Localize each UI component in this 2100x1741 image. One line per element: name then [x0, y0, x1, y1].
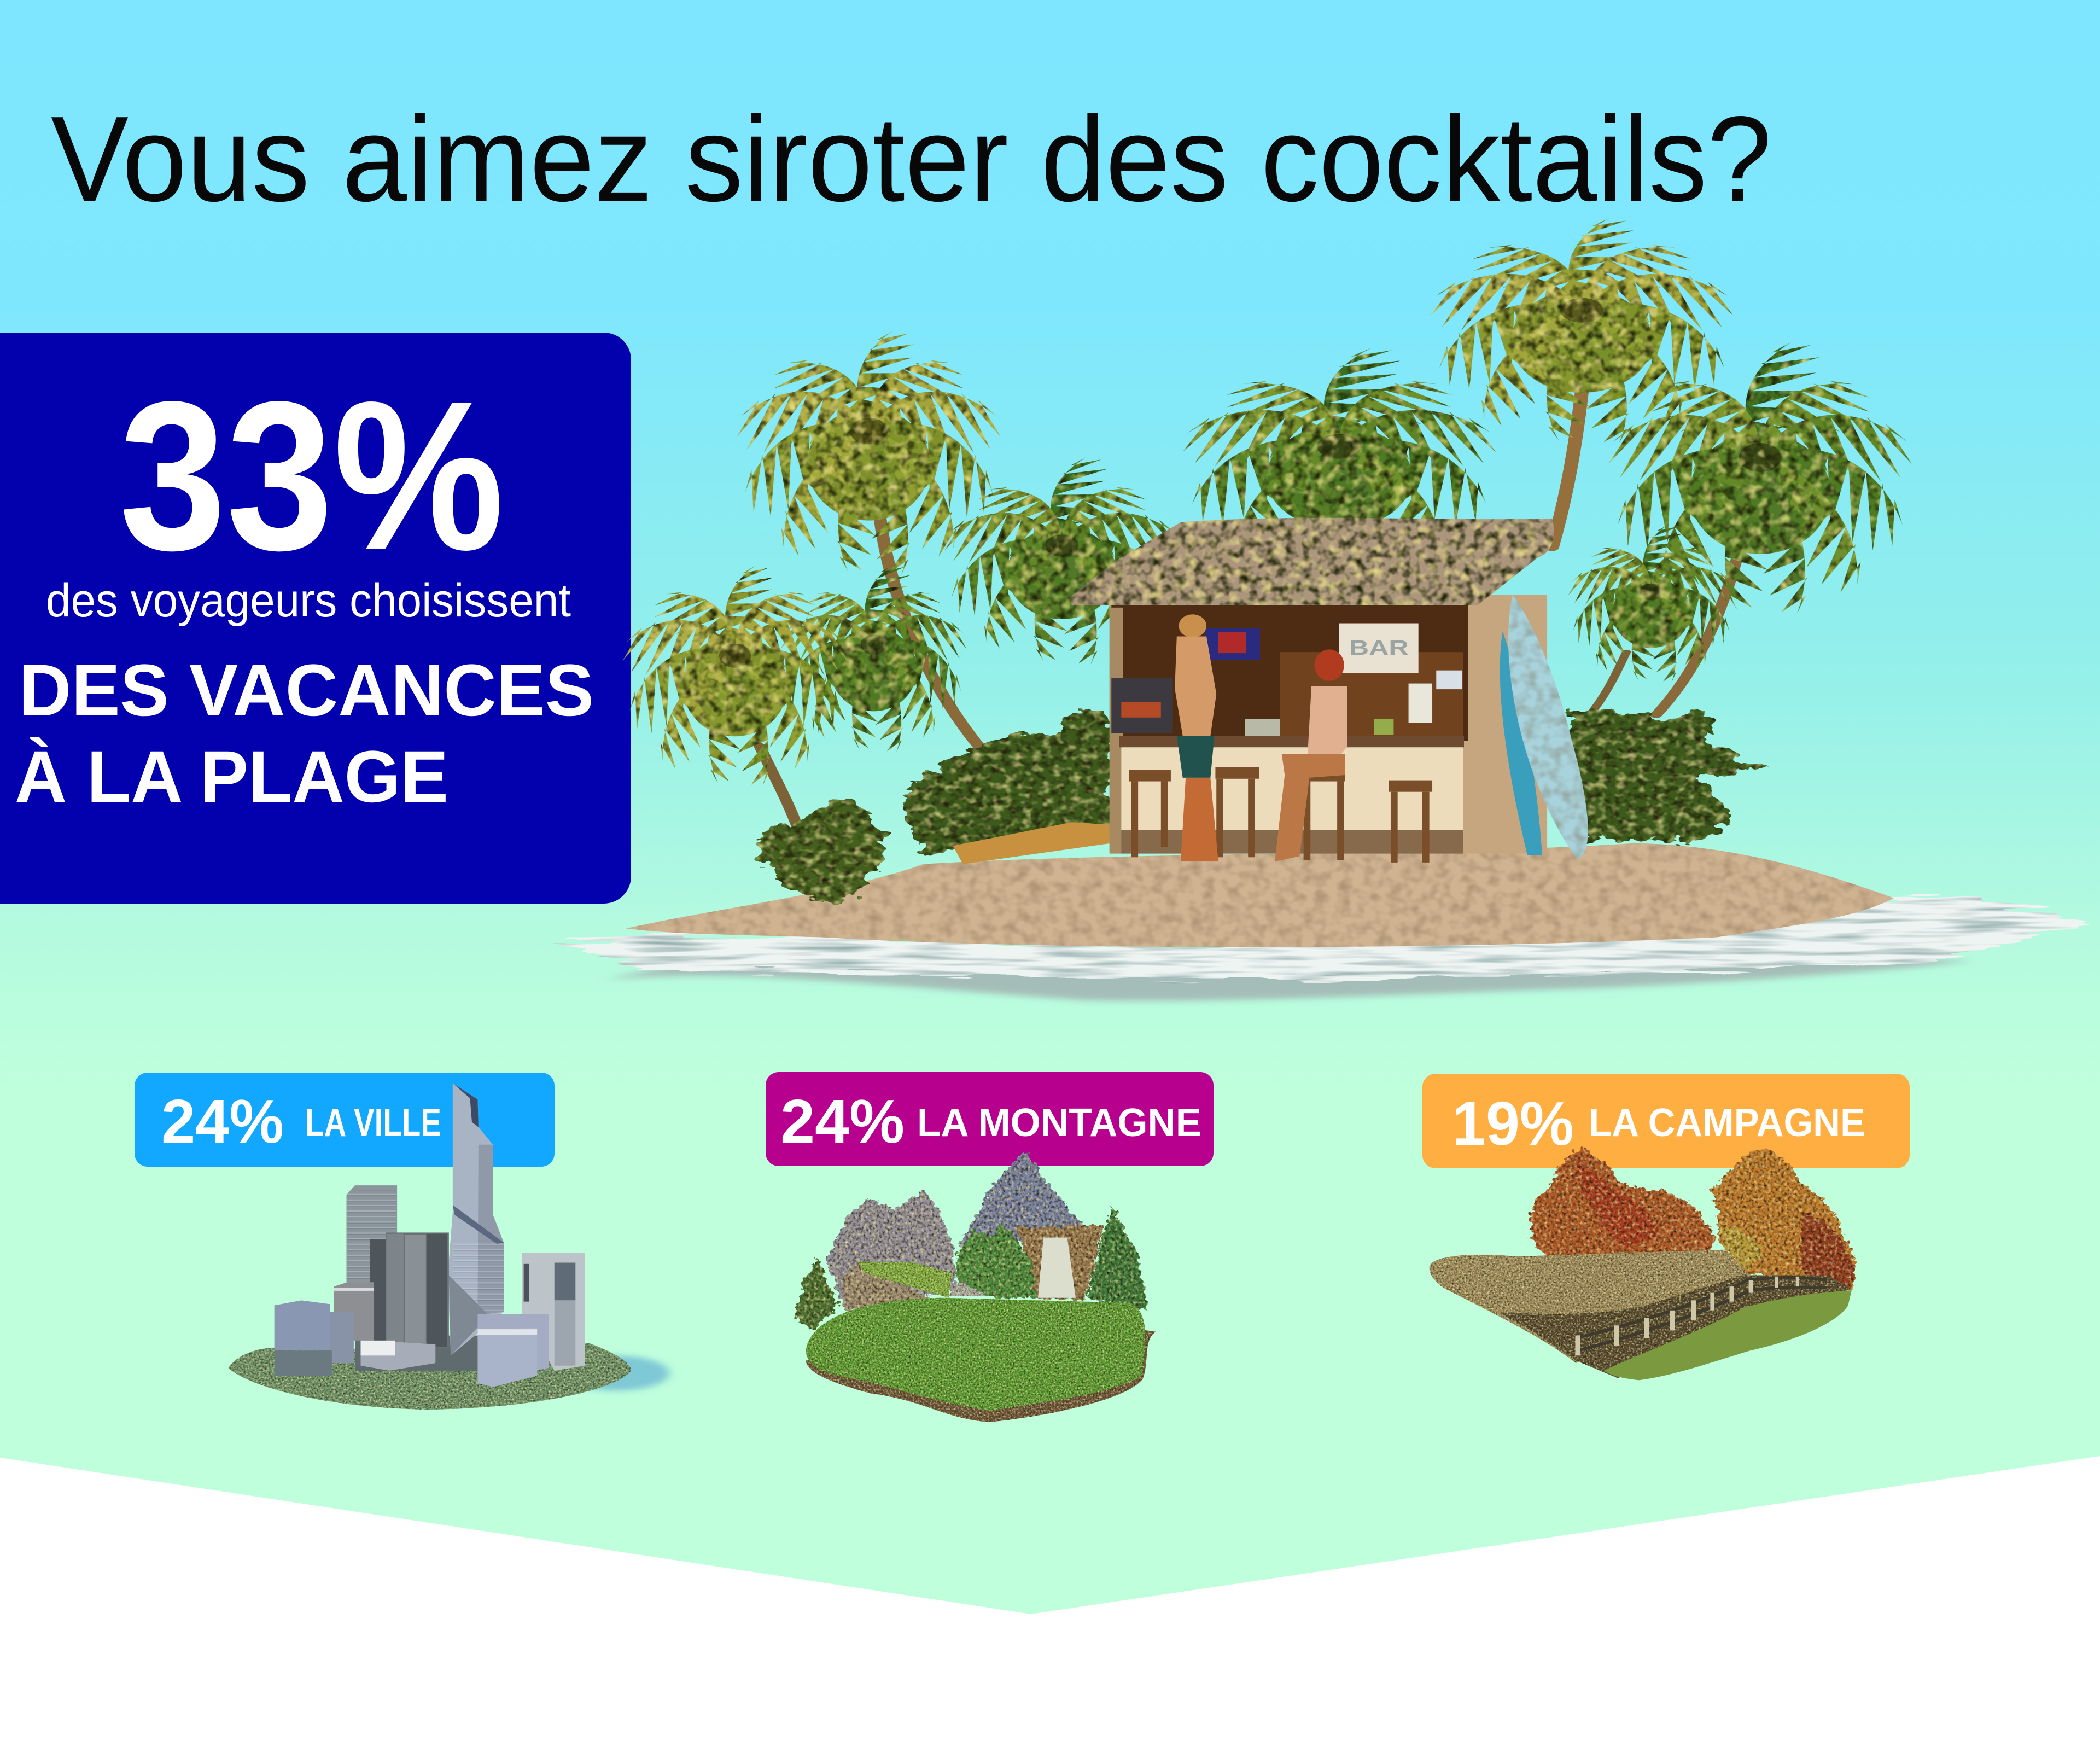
- palm trunks: [760, 364, 1745, 832]
- badge: la campagne: LA CAMPAGNE: [1589, 1101, 1865, 1145]
- bottom white chevron: [0, 1456, 2100, 1741]
- green base: [228, 1343, 631, 1410]
- meadow: [858, 1261, 952, 1298]
- illustration: beach island with bar hut: [562, 217, 2087, 1001]
- title: Vous aimez siroter des cocktails?: [51, 91, 1772, 227]
- counter front: [1121, 747, 1463, 831]
- sign: [1339, 624, 1419, 673]
- big percentage: 33%: [119, 358, 504, 595]
- sand: [626, 843, 1894, 947]
- woman: [1275, 649, 1347, 861]
- foam: [562, 894, 2087, 980]
- grass: [1604, 1290, 1852, 1380]
- badge: la campagne: [1422, 1074, 1910, 1168]
- badge: la campagne: 19%: [1452, 1089, 1574, 1158]
- soil rim: [806, 1328, 1156, 1422]
- bar interior: [1111, 605, 1468, 741]
- badge: la ville: [135, 1073, 555, 1167]
- autumn trees: [1531, 1149, 1856, 1289]
- headline: DES VACANCES: [19, 650, 594, 731]
- hut: [1110, 595, 1547, 863]
- badge: la montagne: LA MONTAGNE: [917, 1101, 1201, 1145]
- left post: [1110, 608, 1123, 854]
- bushes: [757, 709, 1765, 904]
- illustration: countryside: [1430, 1149, 1856, 1380]
- hut: BAR: [1349, 636, 1409, 660]
- stools: [1129, 767, 1432, 863]
- poster and bottles: [1205, 628, 1260, 660]
- grey rock: [949, 1264, 999, 1296]
- badge: la montagne: 24%: [780, 1087, 905, 1156]
- subtitle: des voyageurs choisissent: [46, 574, 571, 627]
- illustration: city: [228, 1083, 669, 1410]
- badge: la montagne: [766, 1072, 1214, 1166]
- headline: À LA PLAGE: [15, 736, 448, 818]
- grass: [806, 1298, 1145, 1411]
- buildings: [275, 1083, 585, 1387]
- right wall: [1463, 595, 1547, 854]
- fence: [1576, 1277, 1827, 1350]
- palm crowns: [616, 217, 1920, 791]
- illustration: mountain: [794, 1151, 1156, 1422]
- fence posts: [1575, 1277, 1799, 1355]
- waterfall: [1038, 1238, 1076, 1298]
- rock faces: [826, 1151, 1104, 1312]
- wooden plank: [953, 822, 1111, 864]
- badge: la ville: 24%: [161, 1087, 284, 1156]
- shadow: [562, 1355, 669, 1391]
- wheat field: [1430, 1250, 1775, 1363]
- counter: [1119, 736, 1464, 747]
- surfboards: [1500, 595, 1588, 859]
- headline: [15, 650, 594, 818]
- panel: beach 33%: [0, 333, 631, 904]
- water shadow: [606, 945, 1973, 1001]
- roof: [1070, 518, 1554, 605]
- badge: la ville: LA VILLE: [305, 1101, 441, 1145]
- man: [1175, 614, 1218, 861]
- trees: [794, 1206, 1148, 1329]
